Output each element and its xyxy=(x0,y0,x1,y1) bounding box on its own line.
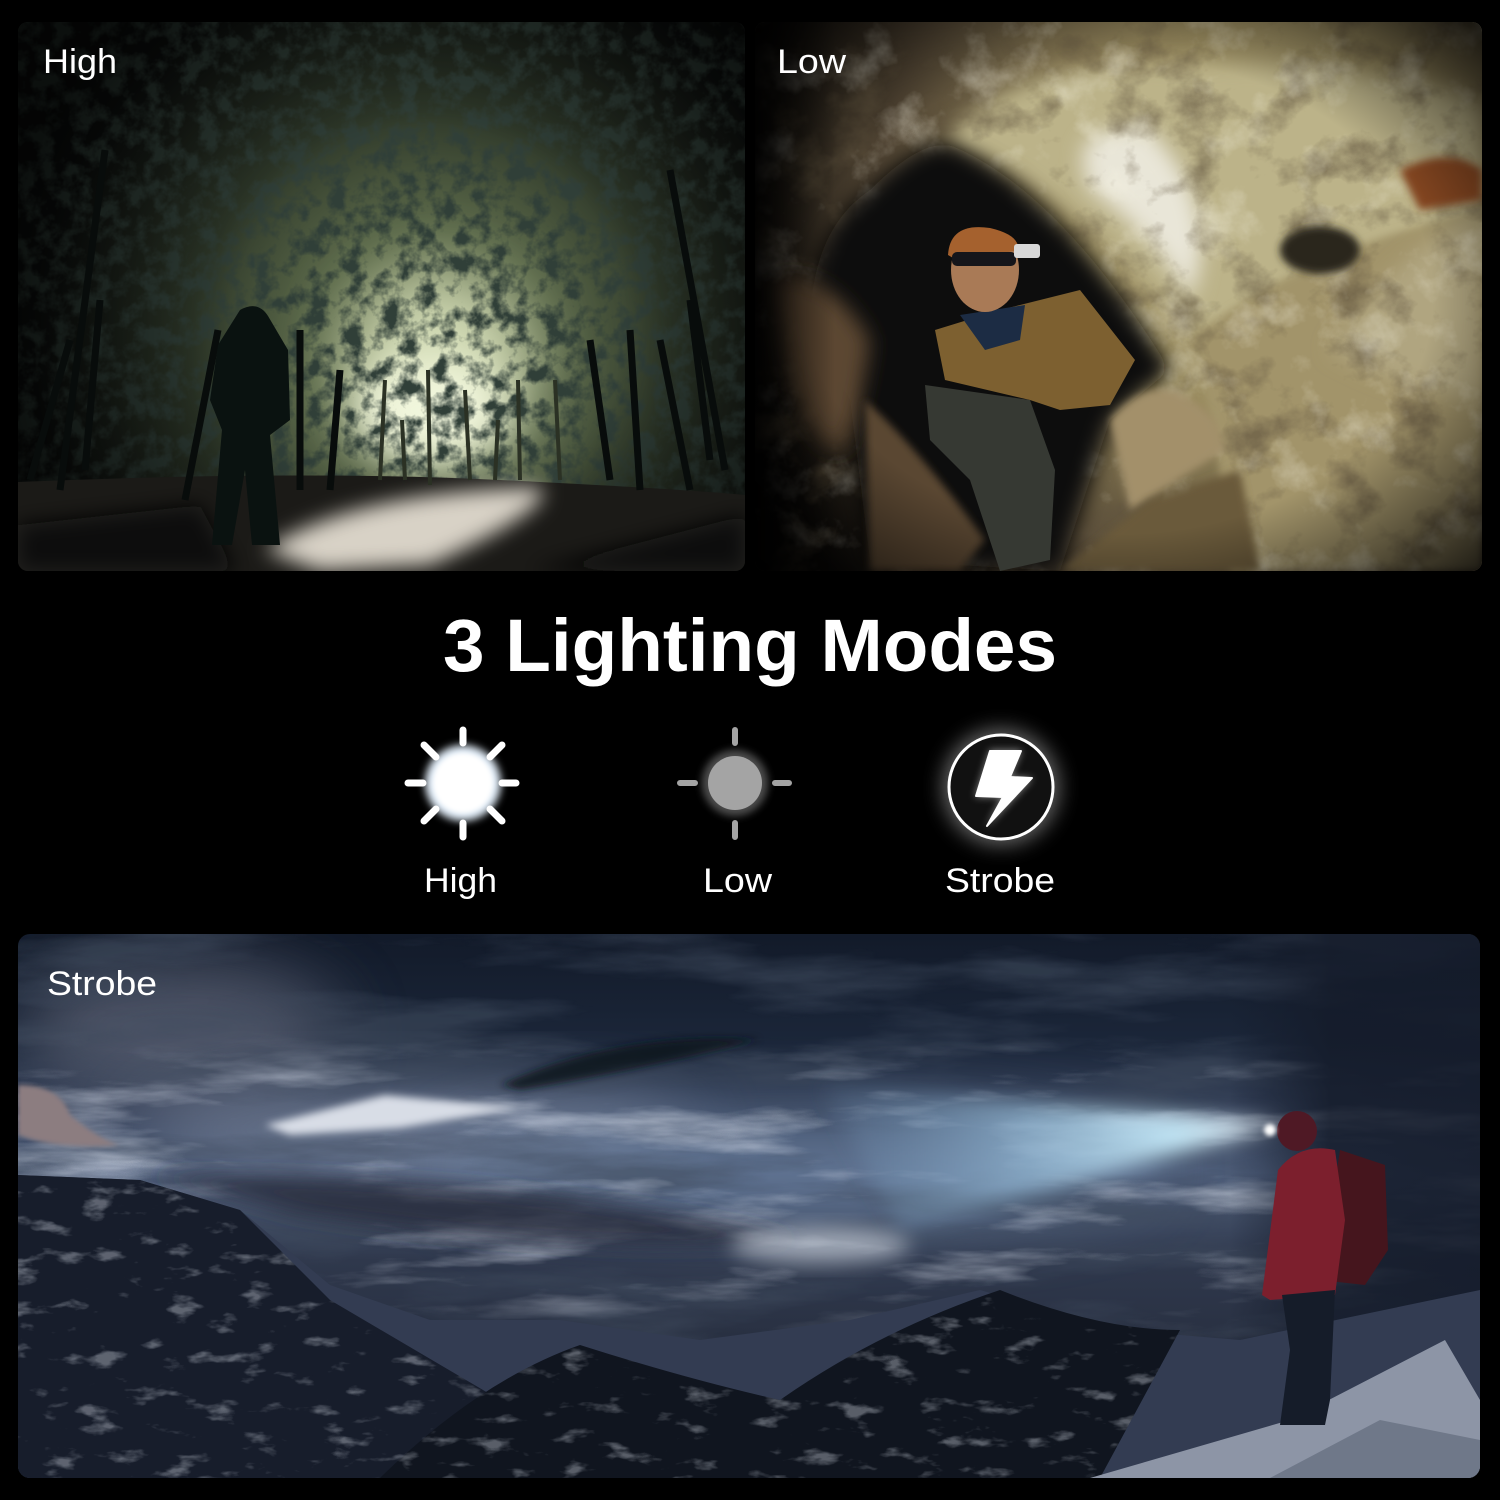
label: high photo: High xyxy=(43,43,117,81)
icon label: low: Low xyxy=(703,862,772,900)
photo panel: strobe mode on mountain xyxy=(18,934,1480,1478)
photo panel: high mode in forest xyxy=(18,22,745,571)
label: low photo: Low xyxy=(777,43,846,81)
hiker xyxy=(1262,1111,1388,1425)
forest silhouette xyxy=(210,306,290,545)
label: strobe photo: Strobe xyxy=(47,965,157,1003)
person in cave xyxy=(925,227,1135,571)
icon label: strobe: Strobe xyxy=(945,862,1055,900)
icon: high brightness sun xyxy=(408,730,516,837)
title: 3 Lighting Modes xyxy=(443,604,1057,687)
light beam xyxy=(820,1085,1278,1230)
icon label: high: High xyxy=(424,862,497,900)
photo panel: low mode in cave xyxy=(755,22,1483,571)
icon: low brightness sun xyxy=(680,730,789,837)
icon: strobe bolt xyxy=(943,729,1059,845)
